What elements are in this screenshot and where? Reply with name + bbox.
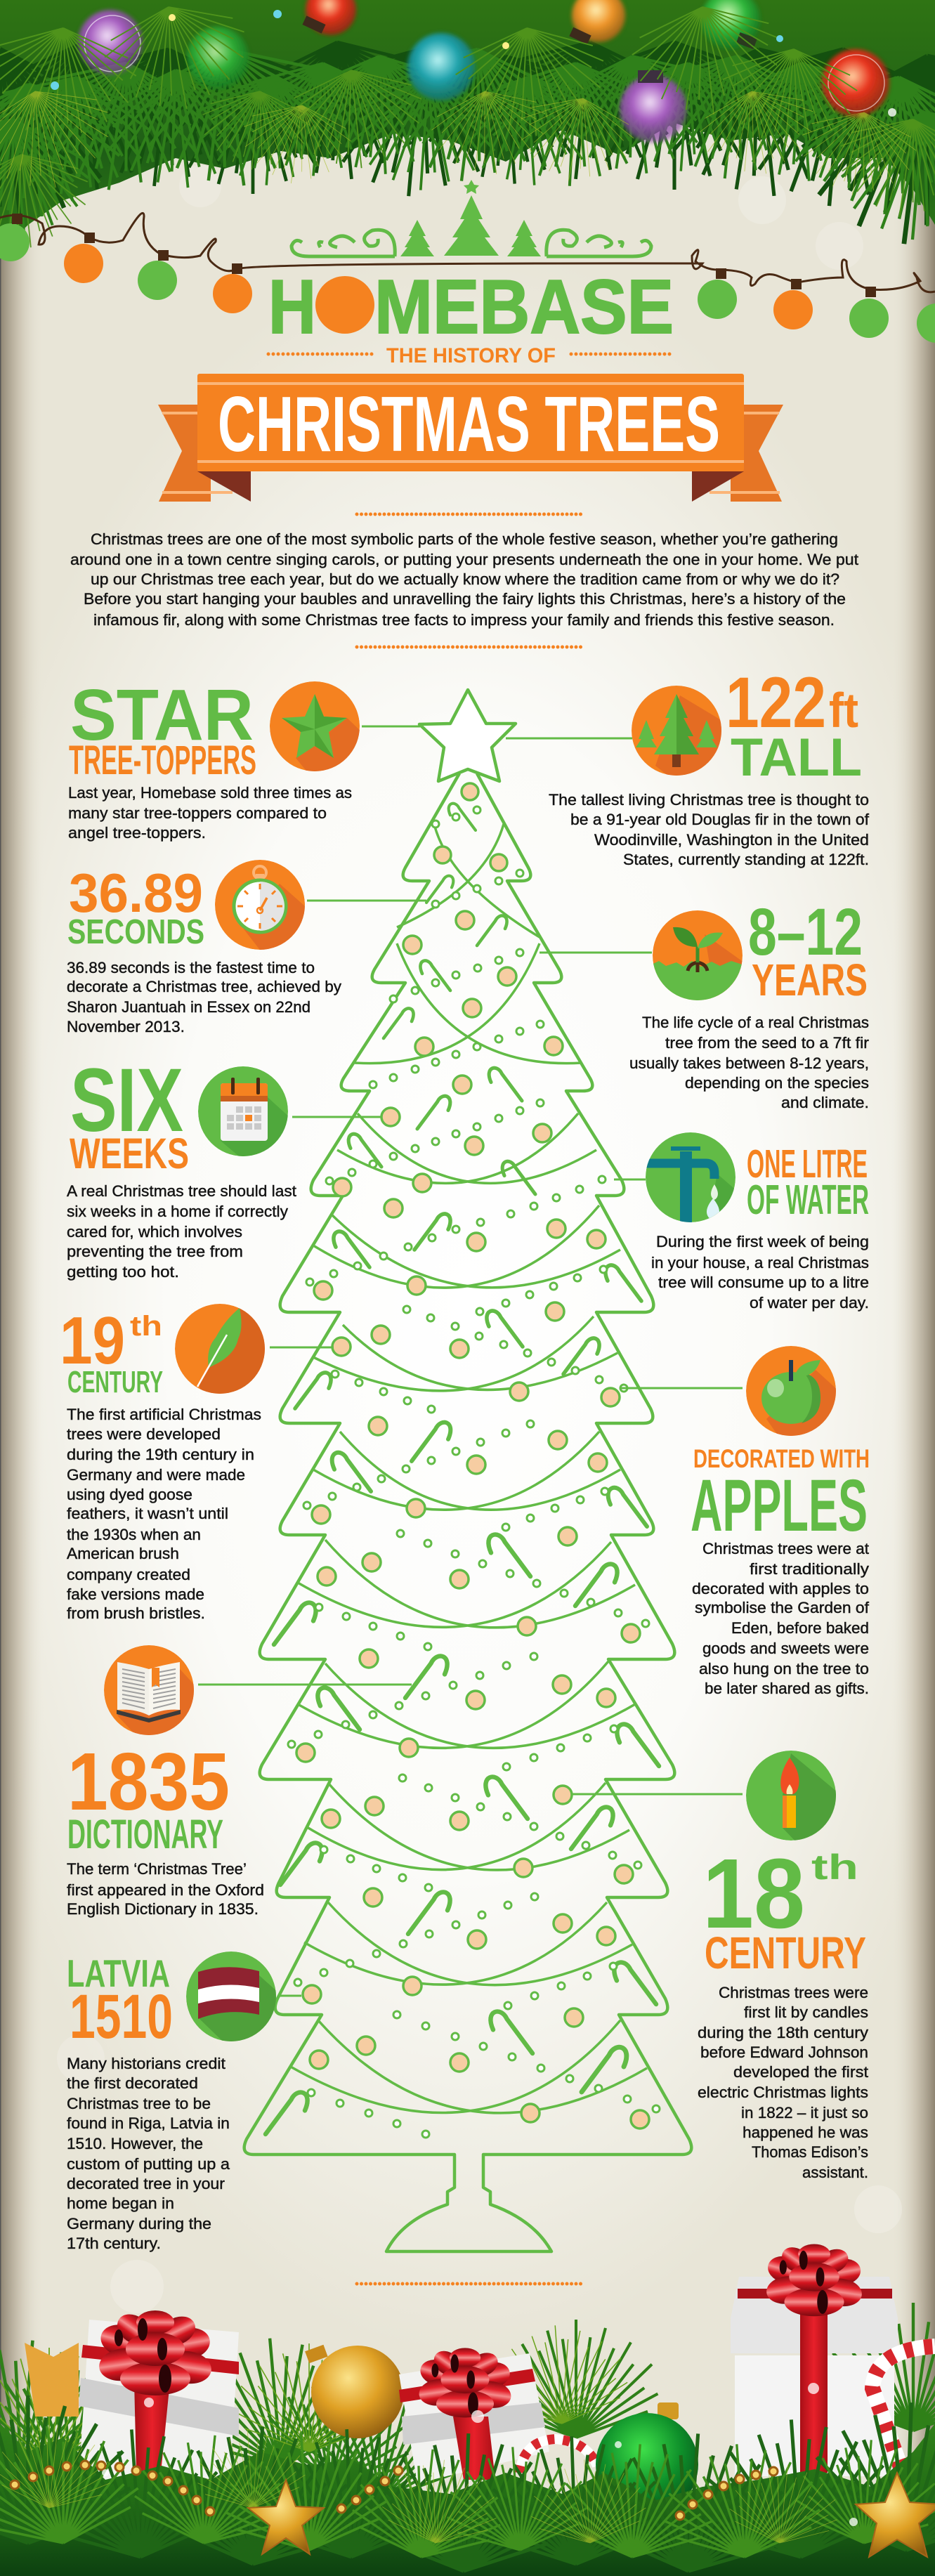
icon: candle [746,1751,854,1859]
large baubles [296,783,649,2129]
candy cane stripes small [520,2439,597,2473]
subheading: tall: TALL [731,728,862,787]
connector [620,1387,743,1390]
panel: 36.89 seconds [67,860,426,1035]
connector [307,899,426,902]
subheading: dictionary: DICTIONARY [67,1812,223,1857]
body text: from brush bristles. [67,1604,205,1622]
body text [67,1860,264,1918]
body text: feathers, it wasn’t until [67,1505,228,1522]
star tree-topper outline [419,690,516,781]
body text [549,791,870,868]
top pine garland with coloured lights [0,0,935,270]
body text: The term ‘Christmas Tree’ [67,1860,247,1878]
body text: developed the first [733,2063,869,2081]
body text: November 2013. [67,1018,185,1035]
connector [279,1995,301,1996]
panel: 8-12 years [540,895,870,1111]
subheading: century: CENTURY [705,1928,866,1978]
subheading: years: YEARS [752,955,868,1005]
body text: decorated with apples to [692,1580,869,1597]
body text: custom of putting up a [67,2155,230,2173]
gold bauble [305,2345,404,2438]
body text: home began in [67,2195,174,2212]
body text: States, currently standing at 122ft. [623,851,869,868]
connector [292,1116,381,1118]
icon: stopwatch [215,860,305,950]
icon: calendar [198,1066,288,1156]
heading: latvia: LATVIA [67,1951,170,1995]
body text: trees were developed [67,1425,221,1443]
body text: tree will consume up to a litre [658,1274,869,1291]
small ornaments [288,806,660,2138]
green bauble [596,2402,698,2516]
subheading: seconds: SECONDS [67,913,204,951]
body text: Thomas Edison’s [752,2143,868,2161]
intro text block: infamous fir, along with some Christmas tree facts to impress your family and friends this festive season. [93,611,835,629]
tree outline [244,773,691,2251]
body text: Many historians credit [67,2055,226,2072]
body text: assistant. [802,2164,868,2181]
intro text block: around one in a town centre singing carols, or putting your presents underneath the one in your home. We put [70,551,859,568]
subtitle: the history of: THE HISTORY OF [386,344,556,367]
body text: be later shared as gifts. [705,1680,869,1697]
icon: latvian flag [186,1951,294,2060]
heading: 36.89: 36.89 [69,862,203,924]
body text [698,1984,869,2181]
icon: seedling [653,910,743,1000]
panel: star tree-toppers [68,674,420,842]
body text: Woodinville, Washington in the United [594,831,869,849]
heading: 18th: 18 [702,1838,805,1949]
body text [651,1233,869,1312]
body text: cared for, which involves [67,1223,242,1241]
heading: star: STAR [70,674,254,755]
body text: Christmas tree to be [67,2095,211,2112]
body text: of water per day. [750,1294,869,1312]
body text: and climate. [781,1094,869,1111]
body text: decorated tree in your [67,2175,225,2192]
panel: 1835 dictionary [67,1645,412,1918]
icon: goose feather quill [175,1304,265,1394]
body text: 36.89 seconds is the fastest time to [67,959,315,976]
body text: Last year, Homebase sold three times as [68,784,352,802]
body text: in 1822 – it just so [741,2104,868,2121]
title: HOMEBASE logo [268,264,674,350]
body text: in your house, a real Christmas [651,1254,869,1271]
heading: 19th: th [130,1311,162,1342]
body text: happened he was [743,2124,868,2141]
heading: six: SIX [70,1050,183,1151]
panel: six weeks [67,1050,381,1281]
gift middle [399,2346,549,2483]
bottom pine garland with gifts and baubles [0,2242,935,2576]
body text: also hung on the tree to [699,1660,869,1678]
heading: 122ft: ft [829,683,858,738]
gift left [25,2308,239,2508]
intro text block: Before you start hanging your baubles and unravelling the fairy lights this Christmas, here’s a history of the [84,590,846,608]
icon: green star [270,681,360,771]
icon: three fir trees [632,686,721,776]
title: HOMEBASE logo: MEBASE [374,264,674,350]
body text: before Edward Johnson [700,2044,868,2061]
title banner: christmas trees [158,374,783,502]
connector [540,951,652,954]
body text: first lit by candles [744,2003,868,2021]
body text: English Dictionary in 1835. [67,1900,259,1918]
panel: one litre of water [614,1132,869,1312]
body text: A real Christmas tree should last [67,1182,297,1200]
title: HOMEBASE logo: H [268,264,316,350]
body text: Sharon Juantuah in Essex on 22nd [67,998,310,1016]
subheading: tree-toppers: TREE-TOPPERS [69,738,256,783]
body text: company created [67,1566,190,1583]
subheading: weeks: WEEKS [70,1130,189,1177]
logo ornament: three trees and scrolls [292,180,651,256]
body text [67,1406,261,1622]
connector [506,738,632,739]
connector [270,1346,334,1349]
body text: Christmas trees were [719,1984,868,2001]
body text: preventing the tree from [67,1243,243,1260]
body text: be a 91-year old Douglas fir in the town of [570,811,870,828]
body text: American brush [67,1545,179,1562]
candy cane right [872,2346,935,2487]
coloured lights [78,0,889,143]
intro text block: up our Christmas tree each year, but do we actually know where the tradition came from or why we do it? [91,570,839,588]
body text: decorate a Christmas tree, achieved by [67,978,342,995]
panel: latvia 1510 [67,1951,301,2252]
body text: Eden, before baked [731,1619,869,1637]
body text: first appeared in the Oxford [67,1881,264,1899]
garland swags [289,824,647,2113]
heading: 8-12: 8–12 [748,895,863,969]
body text: 17th century. [67,2235,161,2252]
panel: 18th century [573,1751,869,2181]
icon: water tap [646,1132,735,1222]
heading: decorated with: DECORATED WITH [693,1444,870,1473]
body text: 1510. However, the [67,2135,203,2152]
body text: usually takes between 8-12 years, [629,1054,869,1072]
pine foliage foreground [0,2395,935,2576]
body text: The tallest living Christmas tree is thought to [549,791,869,809]
body text [68,784,352,842]
connector [614,1179,646,1180]
icon: open book [104,1645,212,1753]
panel: 122ft tall [506,662,870,868]
subheading: century: CENTURY [67,1365,163,1399]
body text: electric Christmas lights [698,2084,868,2101]
body text: symbolise the Garden of [695,1599,870,1616]
heading: 19th: 19 [60,1303,125,1378]
string of festive bulbs [0,213,935,343]
body text: the 1930s when an [67,1526,201,1543]
connector [198,1683,412,1686]
body text: first traditionally [750,1560,870,1578]
gold bead strings [11,2461,778,2520]
body text: The first artificial Christmas [67,1406,261,1423]
body text [629,1014,870,1111]
candy cane small [520,2439,597,2473]
body text: depending on the species [685,1074,869,1092]
body text: many star tree-toppers compared to [68,804,327,822]
panel: 19th century [60,1303,334,1622]
gold stars [248,2473,935,2557]
body text: found in Riga, Latvia in [67,2114,230,2132]
body text: goods and sweets were [702,1640,869,1657]
intro text block: Christmas trees are one of the most symbolic parts of the whole festive season, whether you’re gathering [91,530,838,548]
subheading: 1510: 1510 [70,1981,173,2051]
body text: Germany during the [67,2215,211,2232]
heading: 1835: 1835 [67,1736,230,1827]
heading: 122ft: 122 [726,662,826,743]
dotted divider [357,645,584,649]
body text: during the 18th century [698,2024,869,2041]
dotted divider [357,513,584,516]
body text: tree from the seed to a 7ft fir [665,1034,870,1052]
body text: getting too hot. [67,1263,179,1281]
body text: using dyed goose [67,1486,192,1503]
panel: decorated with apples [620,1346,870,1697]
body text: The life cycle of a real Christmas [642,1014,869,1031]
heading: 18th: th [811,1848,858,1887]
body text: Germany and were made [67,1466,245,1484]
body text: fake versions made [67,1586,204,1603]
intro text block [70,530,859,629]
body text: angel tree-toppers. [68,824,206,842]
central outlined Christmas tree [244,690,691,2251]
body text: During the first week of being [656,1233,869,1250]
sparkles [102,2383,858,2526]
connector [362,725,420,728]
body text [67,1182,297,1281]
gift right [731,2242,898,2476]
body text: during the 19th century in [67,1446,254,1463]
icon: green apple [746,1346,836,1436]
candy canes [266,804,659,2134]
body text [67,2055,230,2252]
body text [67,959,342,1035]
candy cane stripes right [872,2346,935,2487]
body text [692,1540,870,1697]
connector [573,1793,743,1796]
body text: six weeks in a home if correctly [67,1203,289,1220]
body text: the first decorated [67,2074,198,2092]
body text: Christmas trees were at [702,1540,870,1557]
dotted divider [357,2282,584,2286]
